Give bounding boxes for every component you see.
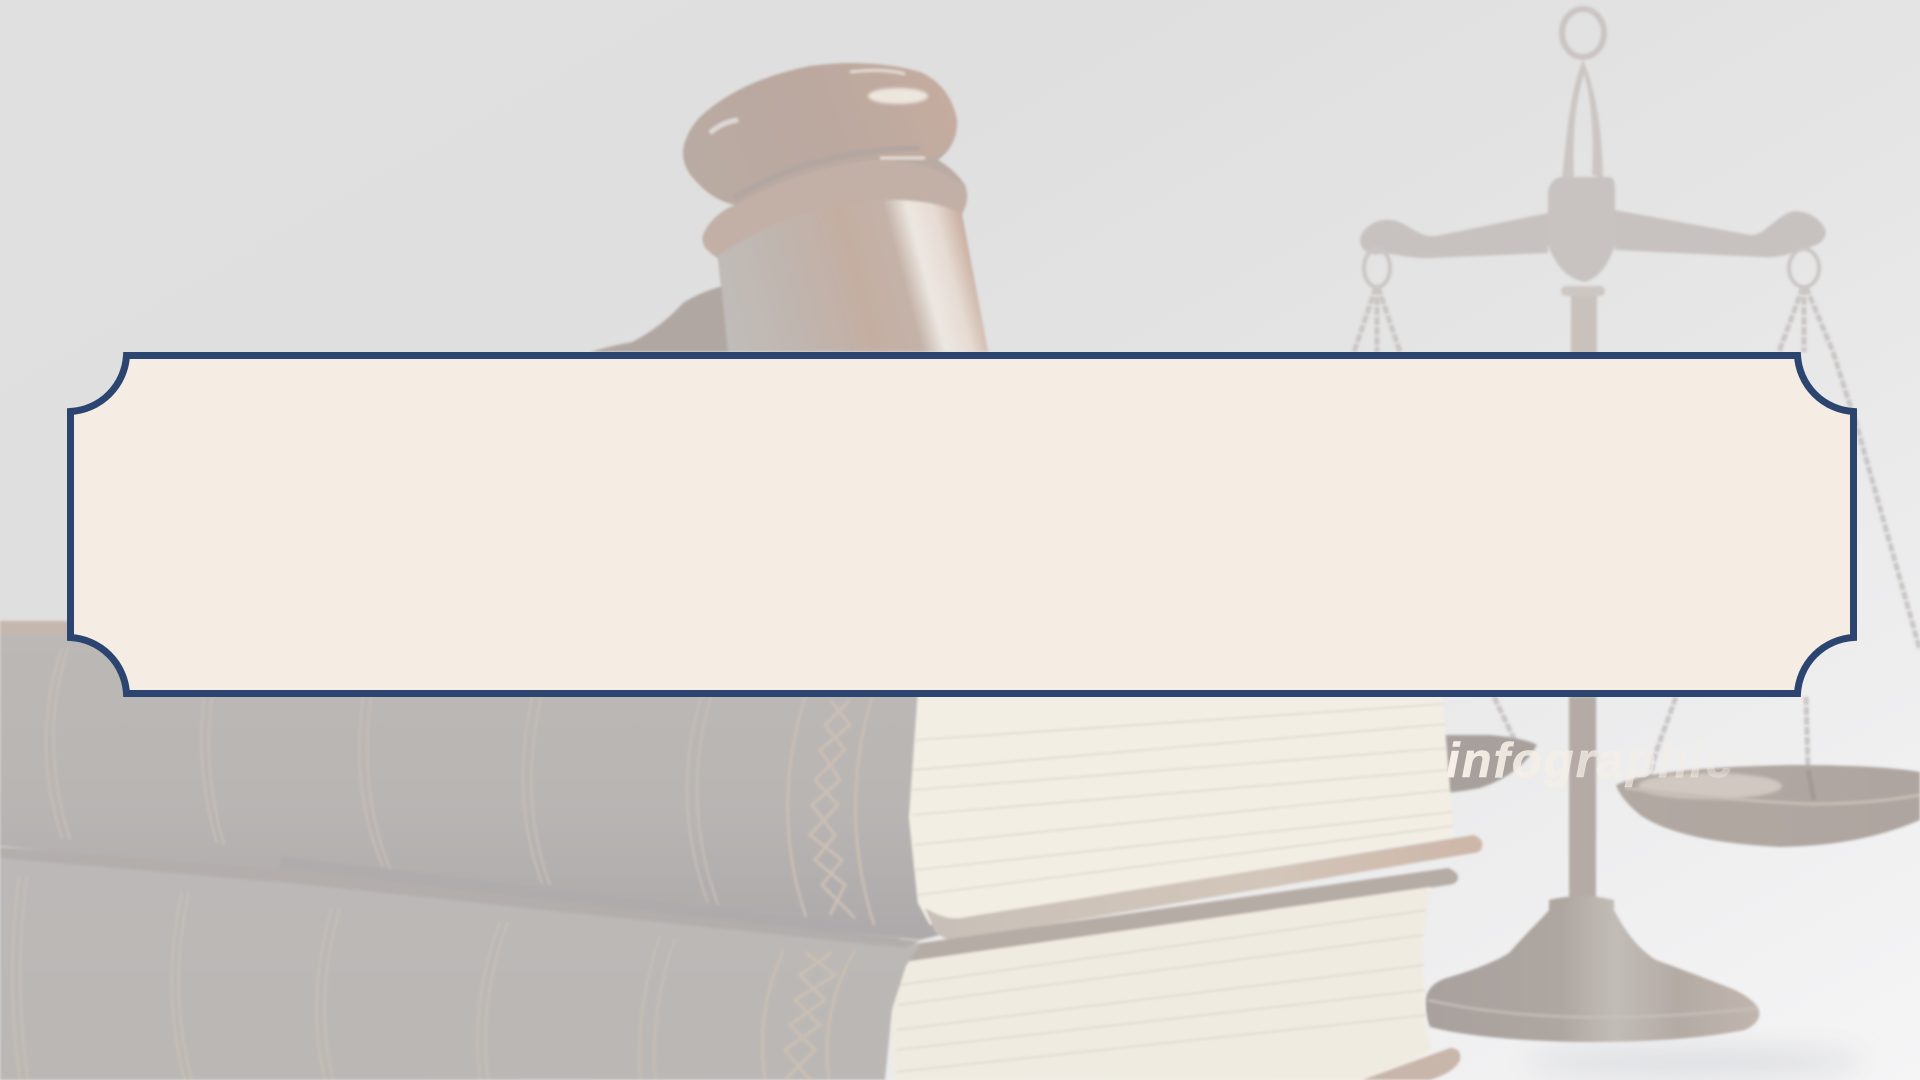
scale column	[1569, 290, 1597, 897]
lower book pages	[890, 887, 1432, 1080]
scales of justice	[1354, 9, 1920, 1076]
gavel ring	[703, 160, 967, 256]
gold spine bands	[12, 648, 718, 1080]
scale centre block	[1548, 177, 1615, 282]
top book pages	[909, 690, 1454, 925]
lower book cover edge	[900, 868, 1458, 966]
scale beam	[1360, 210, 1826, 258]
scale foot	[1426, 896, 1759, 1042]
ornate spine bands	[762, 697, 874, 1080]
gavel barrel	[718, 190, 988, 352]
stacked law books	[0, 621, 1482, 1080]
scale top ring	[1562, 9, 1604, 57]
top book spine	[0, 621, 944, 940]
scale hanger	[1562, 60, 1603, 182]
gavel handle	[590, 286, 735, 352]
lower book spine	[0, 848, 920, 1080]
judge gavel	[590, 63, 988, 352]
watermark text: infographic	[1446, 734, 1735, 788]
lower book vine ornament	[785, 952, 835, 1080]
left pan	[1430, 735, 1537, 793]
top book vine ornament	[810, 700, 855, 918]
gavel cap	[683, 63, 957, 205]
base shadow	[1525, 1048, 1865, 1076]
central notched panel	[70, 356, 1854, 694]
right pan	[1616, 765, 1920, 847]
top book cover edge	[925, 835, 1482, 940]
hanger rings and chains	[1354, 249, 1920, 785]
gavel silhouette	[683, 63, 988, 352]
lower book bottom cover	[1362, 1048, 1460, 1080]
